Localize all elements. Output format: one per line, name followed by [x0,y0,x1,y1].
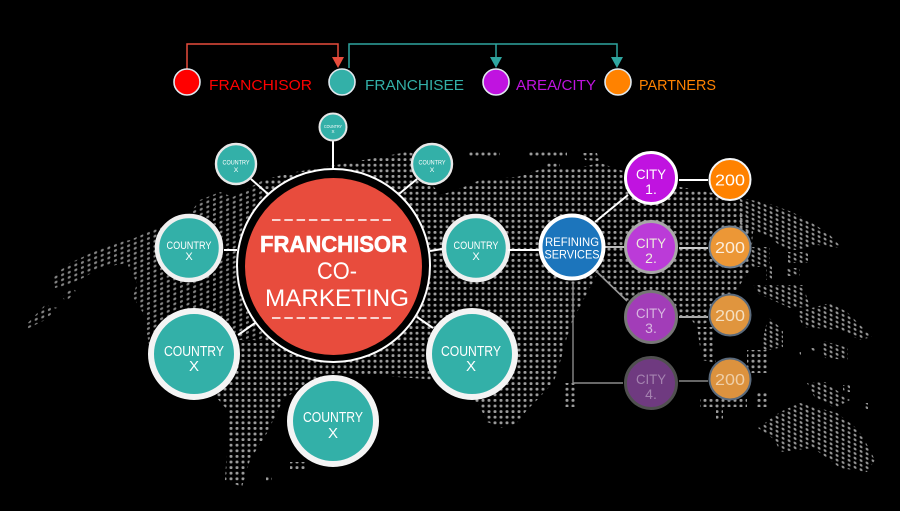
country node: lower right [429,311,515,397]
refining services node: SERVICES [544,248,600,262]
city 2 node: CITY [636,235,667,251]
legend connector: franchisee to area and partners [349,44,623,68]
legend: franchisor: FRANCHISOR [209,77,312,94]
city 3 node [626,292,676,342]
partner node 1 [710,159,750,200]
country node: bottom: X [328,425,338,442]
country node: lower left [151,311,237,397]
central franchisor hub [237,169,430,362]
partner node 3 [710,294,750,336]
connectors: services to cities and partners [508,180,708,383]
dotted world map [25,150,875,487]
partner node 4 [710,358,750,400]
central franchisor hub: FRANCHISOR [260,231,407,257]
partner node 2: 200 [715,240,745,257]
country node: lower left: X [189,358,199,375]
legend: franchisee: FRANCHISEE [365,77,464,94]
legend: partners: PARTNERS [639,77,716,94]
city 4 node [626,358,676,408]
connectors: franchisor to countries [224,141,442,335]
refining services node: REFINING [545,235,599,249]
city 1 node: CITY [636,166,667,182]
country node: upper left: COUNTRY [222,160,250,166]
city 1 node: 1. [645,181,657,197]
country node: top: X [331,129,335,134]
legend: area/city: AREA/CITY [516,77,596,94]
central franchisor hub: CO- [317,258,357,285]
city 3 node: CITY [636,305,667,321]
city 4 node: 4. [645,386,657,402]
partner node 2 [710,226,750,268]
country node: bottom: COUNTRY [303,409,363,426]
central franchisor hub: MARKETING [265,285,409,312]
country node: bottom [290,378,376,464]
country node: right [444,216,508,280]
country node: right: X [472,251,480,263]
country node: left [157,216,221,280]
city 3 node: 3. [645,320,657,336]
country node: upper right [412,144,452,184]
country node: upper right: X [430,167,435,174]
partner node 3: 200 [715,308,745,325]
legend connector: franchisor to franchisee [187,44,344,69]
country node: upper right: COUNTRY [418,160,446,166]
country node: right: COUNTRY [454,240,499,252]
country node: top: COUNTRY [324,124,342,129]
country node: lower right: COUNTRY [441,343,501,360]
legend: partners [605,69,716,95]
country node: top [320,114,346,140]
partner node 1: 200 [715,172,745,190]
city 2 node: 2. [645,250,657,266]
country node: lower left: COUNTRY [164,343,224,360]
legend: franchisor [174,69,312,95]
city 1 node [626,152,676,204]
country node: left: X [185,251,193,263]
legend: franchisee [329,69,464,95]
country node: left: COUNTRY [166,240,212,252]
legend: area/city [483,69,596,95]
country node: lower right: X [466,358,476,375]
country node: upper left [216,144,256,184]
city 2 node [626,222,676,272]
refining services node [540,216,604,278]
city 4 node: CITY [636,371,667,387]
partner node 4: 200 [715,372,745,389]
country node: upper left: X [234,167,239,174]
